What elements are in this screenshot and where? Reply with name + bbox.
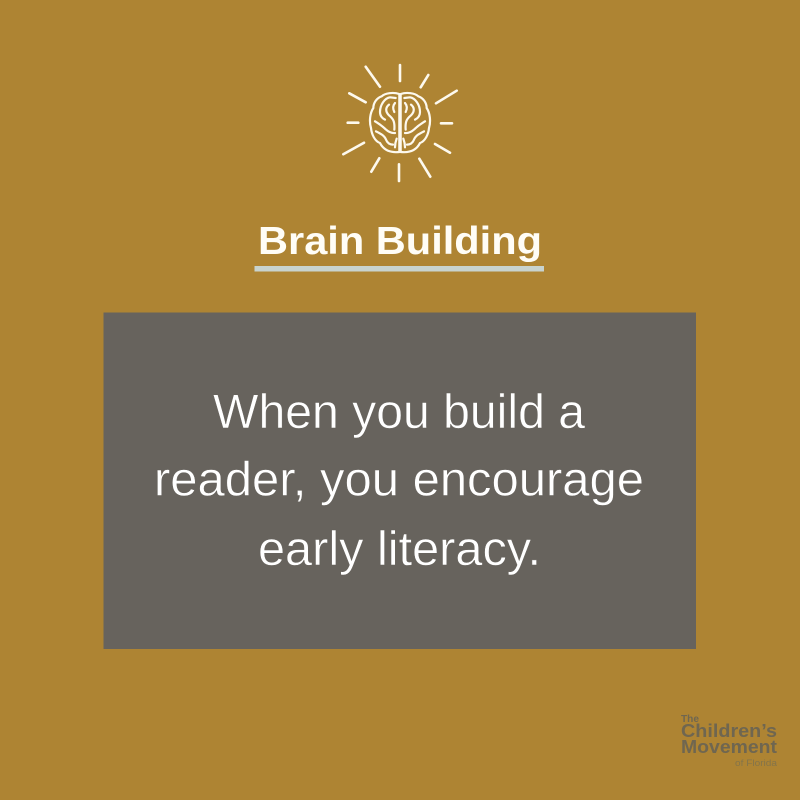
message text bbox=[154, 386, 644, 576]
icon: brain right hemisphere bbox=[401, 93, 430, 152]
heading underline bbox=[254, 266, 544, 272]
logo: The Children's Movement of Florida bbox=[681, 714, 777, 768]
panel background bbox=[104, 312, 696, 649]
icon: brain with radiating lines bbox=[343, 65, 457, 181]
message text: When you build a bbox=[213, 386, 585, 439]
logo: The Children's Movement of Florida: Movement bbox=[681, 737, 777, 757]
message text: early literacy. bbox=[258, 523, 541, 576]
icon: radiating lines bbox=[343, 65, 457, 181]
icon: brain left hemisphere bbox=[370, 93, 399, 152]
message text: reader, you encourage bbox=[154, 454, 644, 506]
logo: The Children's Movement of Florida: of Florida bbox=[735, 758, 777, 768]
logo: The Children's Movement of Florida: The bbox=[681, 714, 699, 725]
panel: message bbox=[104, 312, 696, 649]
heading: Brain Building bbox=[258, 220, 542, 263]
logo: The Children's Movement of Florida: Children’s bbox=[681, 721, 777, 741]
